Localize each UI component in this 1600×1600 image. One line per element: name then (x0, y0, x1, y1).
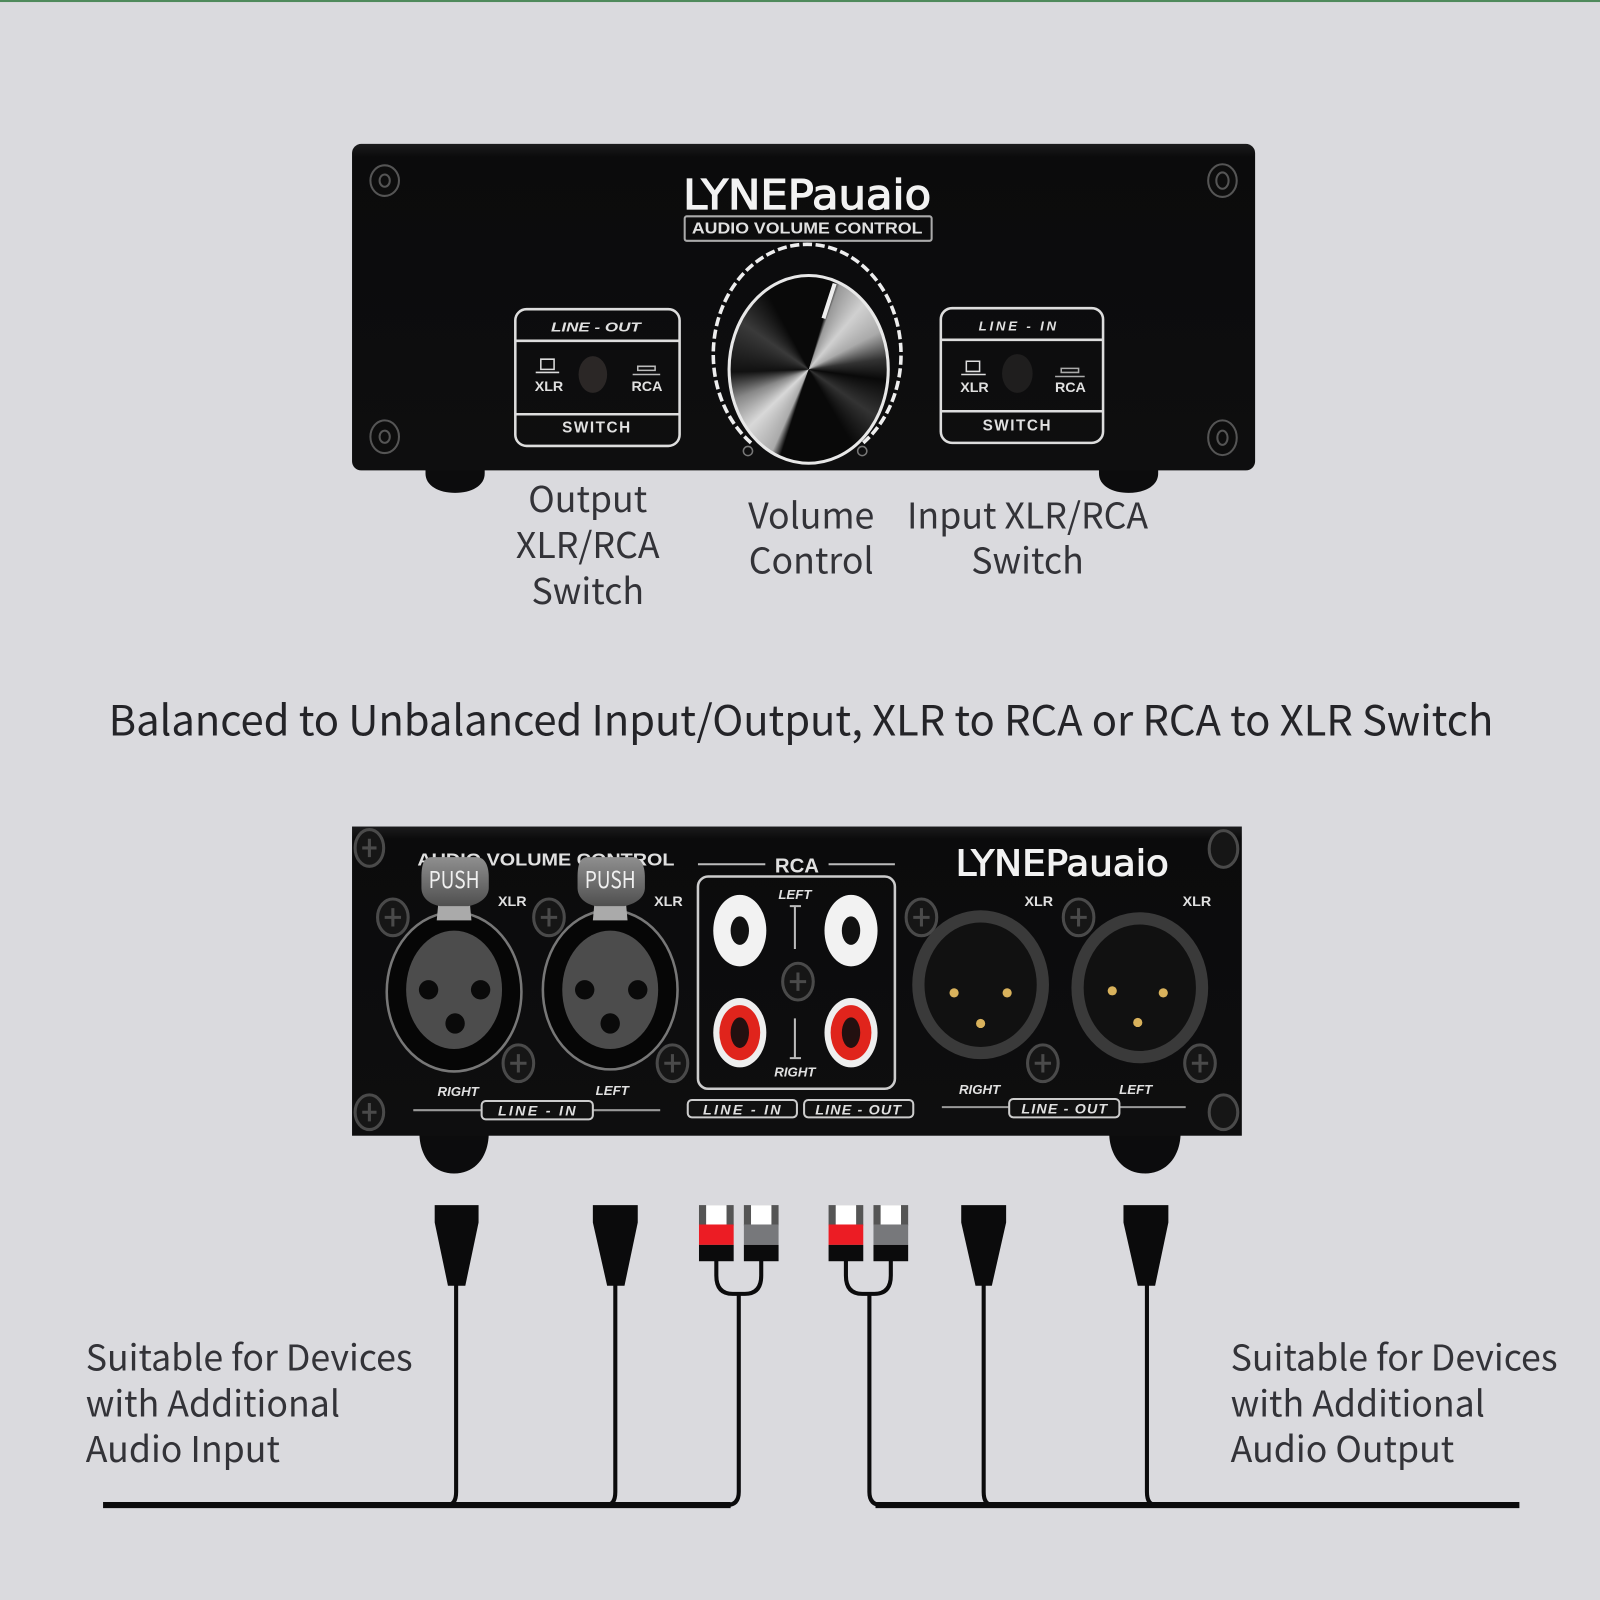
XLR plugs (435, 1205, 1168, 1286)
audio volume control badge: AUDIO VOLUME CONTROL (692, 221, 922, 238)
input switch panel: LINE - IN (979, 319, 1057, 334)
XLR male jack left (1078, 918, 1202, 1057)
output switch panel: XLR (535, 379, 564, 395)
line in and line out badges (413, 1099, 1186, 1119)
white RCA jacks (713, 895, 878, 966)
XLR female jack right (387, 857, 521, 1071)
label: volume control: Volume (748, 489, 874, 540)
volume knob (729, 274, 889, 464)
logo rear: LYNEPauaio (956, 844, 1169, 885)
XLR labels: XLR (654, 894, 683, 910)
front screws (370, 164, 1237, 455)
RCA panel (698, 855, 895, 1089)
caption: audio input: Audio Input (86, 1422, 280, 1473)
caption: audio output: with Additional (1231, 1376, 1485, 1427)
label: input switch: Input XLR/RCA (907, 489, 1148, 540)
front panel body (352, 144, 1255, 470)
XLR labels: XLR (1025, 894, 1054, 910)
red RCA jacks (713, 998, 878, 1067)
XLR male jack right (918, 916, 1043, 1053)
rear panel body (352, 827, 1242, 1136)
brand logo: LYNEPauaio (683, 171, 931, 219)
XLR labels: XLR (498, 894, 527, 910)
audio volume control badge (685, 216, 932, 241)
input switch panel: SWITCH (983, 418, 1052, 435)
label: volume control: Control (749, 533, 874, 584)
caption: audio input: with Additional (86, 1376, 340, 1427)
output switch panel: LINE - OUT (551, 320, 643, 335)
RCA panel: LEFT (778, 887, 813, 902)
rear panel screws (355, 830, 1238, 1130)
left and right channel labels: LEFT (1119, 1082, 1154, 1097)
output switch panel: SWITCH (562, 420, 632, 437)
left and right channel labels (438, 1082, 1154, 1099)
line in and line out badges: LINE - IN (703, 1102, 781, 1118)
rear panel title: AUDIO VOLUME CONTROL (417, 849, 675, 869)
front feet (426, 467, 1158, 493)
output switch panel: RCA (631, 379, 662, 395)
XLR labels (498, 894, 1212, 910)
line in and line out badges: LINE - IN (498, 1103, 576, 1119)
caption: audio output: Suitable for Devices (1231, 1330, 1558, 1381)
heading: Balanced to Unbalanced Input/Output, XLR to RCA or RCA to XLR Switch (109, 688, 1493, 749)
input switch panel: XLR (960, 380, 989, 396)
input switch panel (941, 308, 1103, 443)
RCA plugs input (699, 1205, 779, 1261)
scale end marks (743, 446, 867, 456)
RCA plugs output (829, 1205, 908, 1261)
line in and line out badges: LINE - OUT (815, 1102, 902, 1118)
XLR labels: XLR (1183, 894, 1212, 910)
XLR female jack left (543, 857, 678, 1069)
output switch panel (515, 309, 680, 446)
caption: audio input: Suitable for Devices (86, 1330, 413, 1381)
label: output switch: Switch (531, 564, 644, 615)
label: output switch: Output (528, 472, 647, 523)
rear feet (419, 1133, 1181, 1173)
RCA panel: RIGHT (774, 1065, 817, 1080)
XLR female jack right: PUSH (429, 861, 480, 895)
RCA panel: RCA (775, 855, 819, 877)
rear view of device (352, 827, 1242, 1173)
left and right channel labels: LEFT (596, 1083, 631, 1098)
label: output switch: XLR/RCA (516, 518, 660, 569)
left and right channel labels: RIGHT (438, 1084, 481, 1099)
front view of device (352, 144, 1255, 493)
line in and line out badges: LINE - OUT (1021, 1101, 1108, 1117)
XLR female jack left: PUSH (585, 861, 636, 895)
cable harness (103, 1260, 1519, 1505)
label: input switch: Switch (971, 533, 1084, 584)
volume scale ring (713, 244, 901, 443)
caption: audio output: Audio Output (1231, 1422, 1454, 1473)
input switch panel: RCA (1055, 380, 1086, 396)
left and right channel labels: RIGHT (959, 1082, 1002, 1097)
